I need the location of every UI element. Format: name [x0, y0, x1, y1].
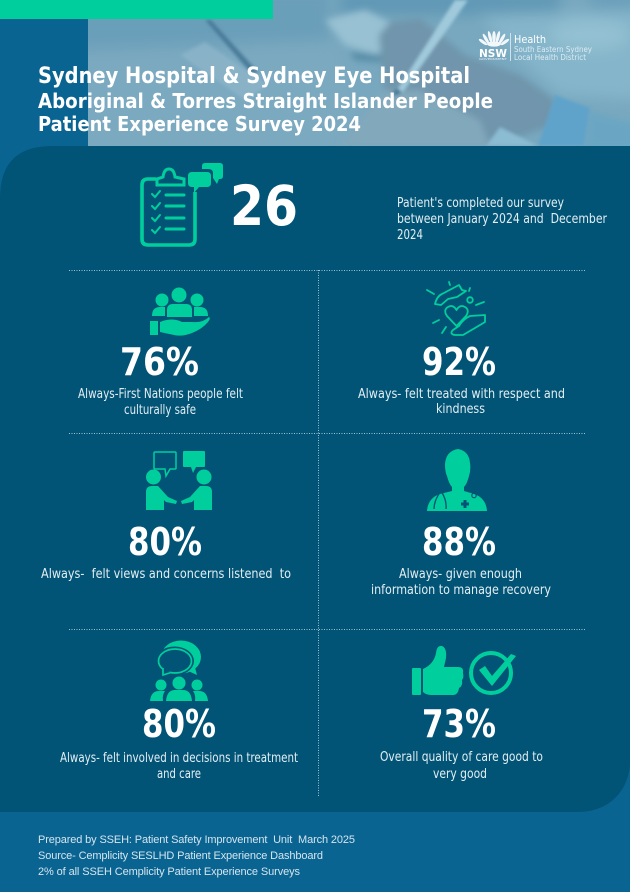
caption — [371, 567, 551, 598]
NSW Health logo — [478, 31, 593, 62]
caption: Always- felt treated with respect and — [358, 387, 565, 402]
title: Aboriginal & Torres Straight Islander People — [38, 89, 493, 113]
waratah mark — [478, 31, 510, 47]
footer notes: 2% of all SSEH Cemplicity Patient Experience Surveys — [38, 866, 300, 878]
footer notes: Source- Cemplicity SESLHD Patient Experience Dashboard — [38, 850, 323, 862]
value: 92% — [422, 340, 496, 384]
NSW Health logo: South Eastern Sydney — [514, 45, 593, 54]
survey description: 2024 — [397, 228, 423, 243]
stat: culturally safe — [78, 288, 243, 418]
icon: thumbs up and check — [412, 646, 516, 695]
stat: views listened to — [41, 451, 291, 582]
caption: Overall quality of care good to — [380, 750, 543, 765]
caption: Always- felt views and concerns listened to — [41, 567, 291, 582]
value: 88% — [422, 520, 496, 564]
NSW Health logo: Health — [514, 34, 546, 46]
caption: and care — [157, 767, 201, 782]
caption — [380, 750, 543, 782]
icon: people in hand — [150, 288, 210, 336]
title: Sydney Hospital & Sydney Eye Hospital — [38, 64, 470, 89]
title — [38, 64, 493, 136]
caption — [78, 387, 243, 418]
caption: Always-First Nations people felt — [78, 387, 243, 402]
value: 73% — [422, 702, 496, 746]
stat: overall quality of care — [380, 646, 543, 782]
caption — [60, 751, 298, 782]
value: 80% — [128, 520, 202, 564]
stat: respect and kindness — [358, 282, 565, 417]
value: 80% — [142, 702, 216, 746]
footer notes: Prepared by SSEH: Patient Safety Improvement Unit March 2025 — [38, 834, 355, 846]
caption: culturally safe — [124, 403, 196, 418]
caption — [358, 387, 565, 417]
NSW Health logo: Local Health District — [514, 53, 586, 62]
green top bar — [0, 0, 273, 19]
NSW Health logo: NSW — [479, 48, 507, 60]
caption: Always- given enough — [399, 567, 522, 582]
NSW Health logo: GOVERNMENT — [479, 57, 508, 61]
caption: information to manage recovery — [371, 583, 551, 598]
stat: 26: 26 — [230, 174, 298, 238]
footer notes — [38, 834, 355, 878]
stat: involved in decisions — [60, 640, 298, 782]
title: Patient Experience Survey 2024 — [38, 112, 361, 136]
survey description — [397, 196, 608, 243]
stat: information for recovery — [371, 449, 551, 598]
value: 76% — [120, 340, 199, 384]
icon: doctor — [427, 449, 487, 511]
icon: group with speech bubbles — [150, 640, 208, 701]
icon: hands and heart — [427, 282, 485, 335]
icon: two people talking — [146, 451, 212, 510]
caption: Always- felt involved in decisions in treatment — [60, 751, 298, 766]
caption: very good — [433, 767, 487, 782]
survey description: Patient's completed our survey — [397, 196, 564, 211]
icon: clipboard with speech bubbles — [142, 163, 223, 245]
panel: survey results — [0, 146, 630, 812]
header photo: hand writing with pen — [88, 0, 630, 146]
caption: kindness — [436, 402, 485, 417]
